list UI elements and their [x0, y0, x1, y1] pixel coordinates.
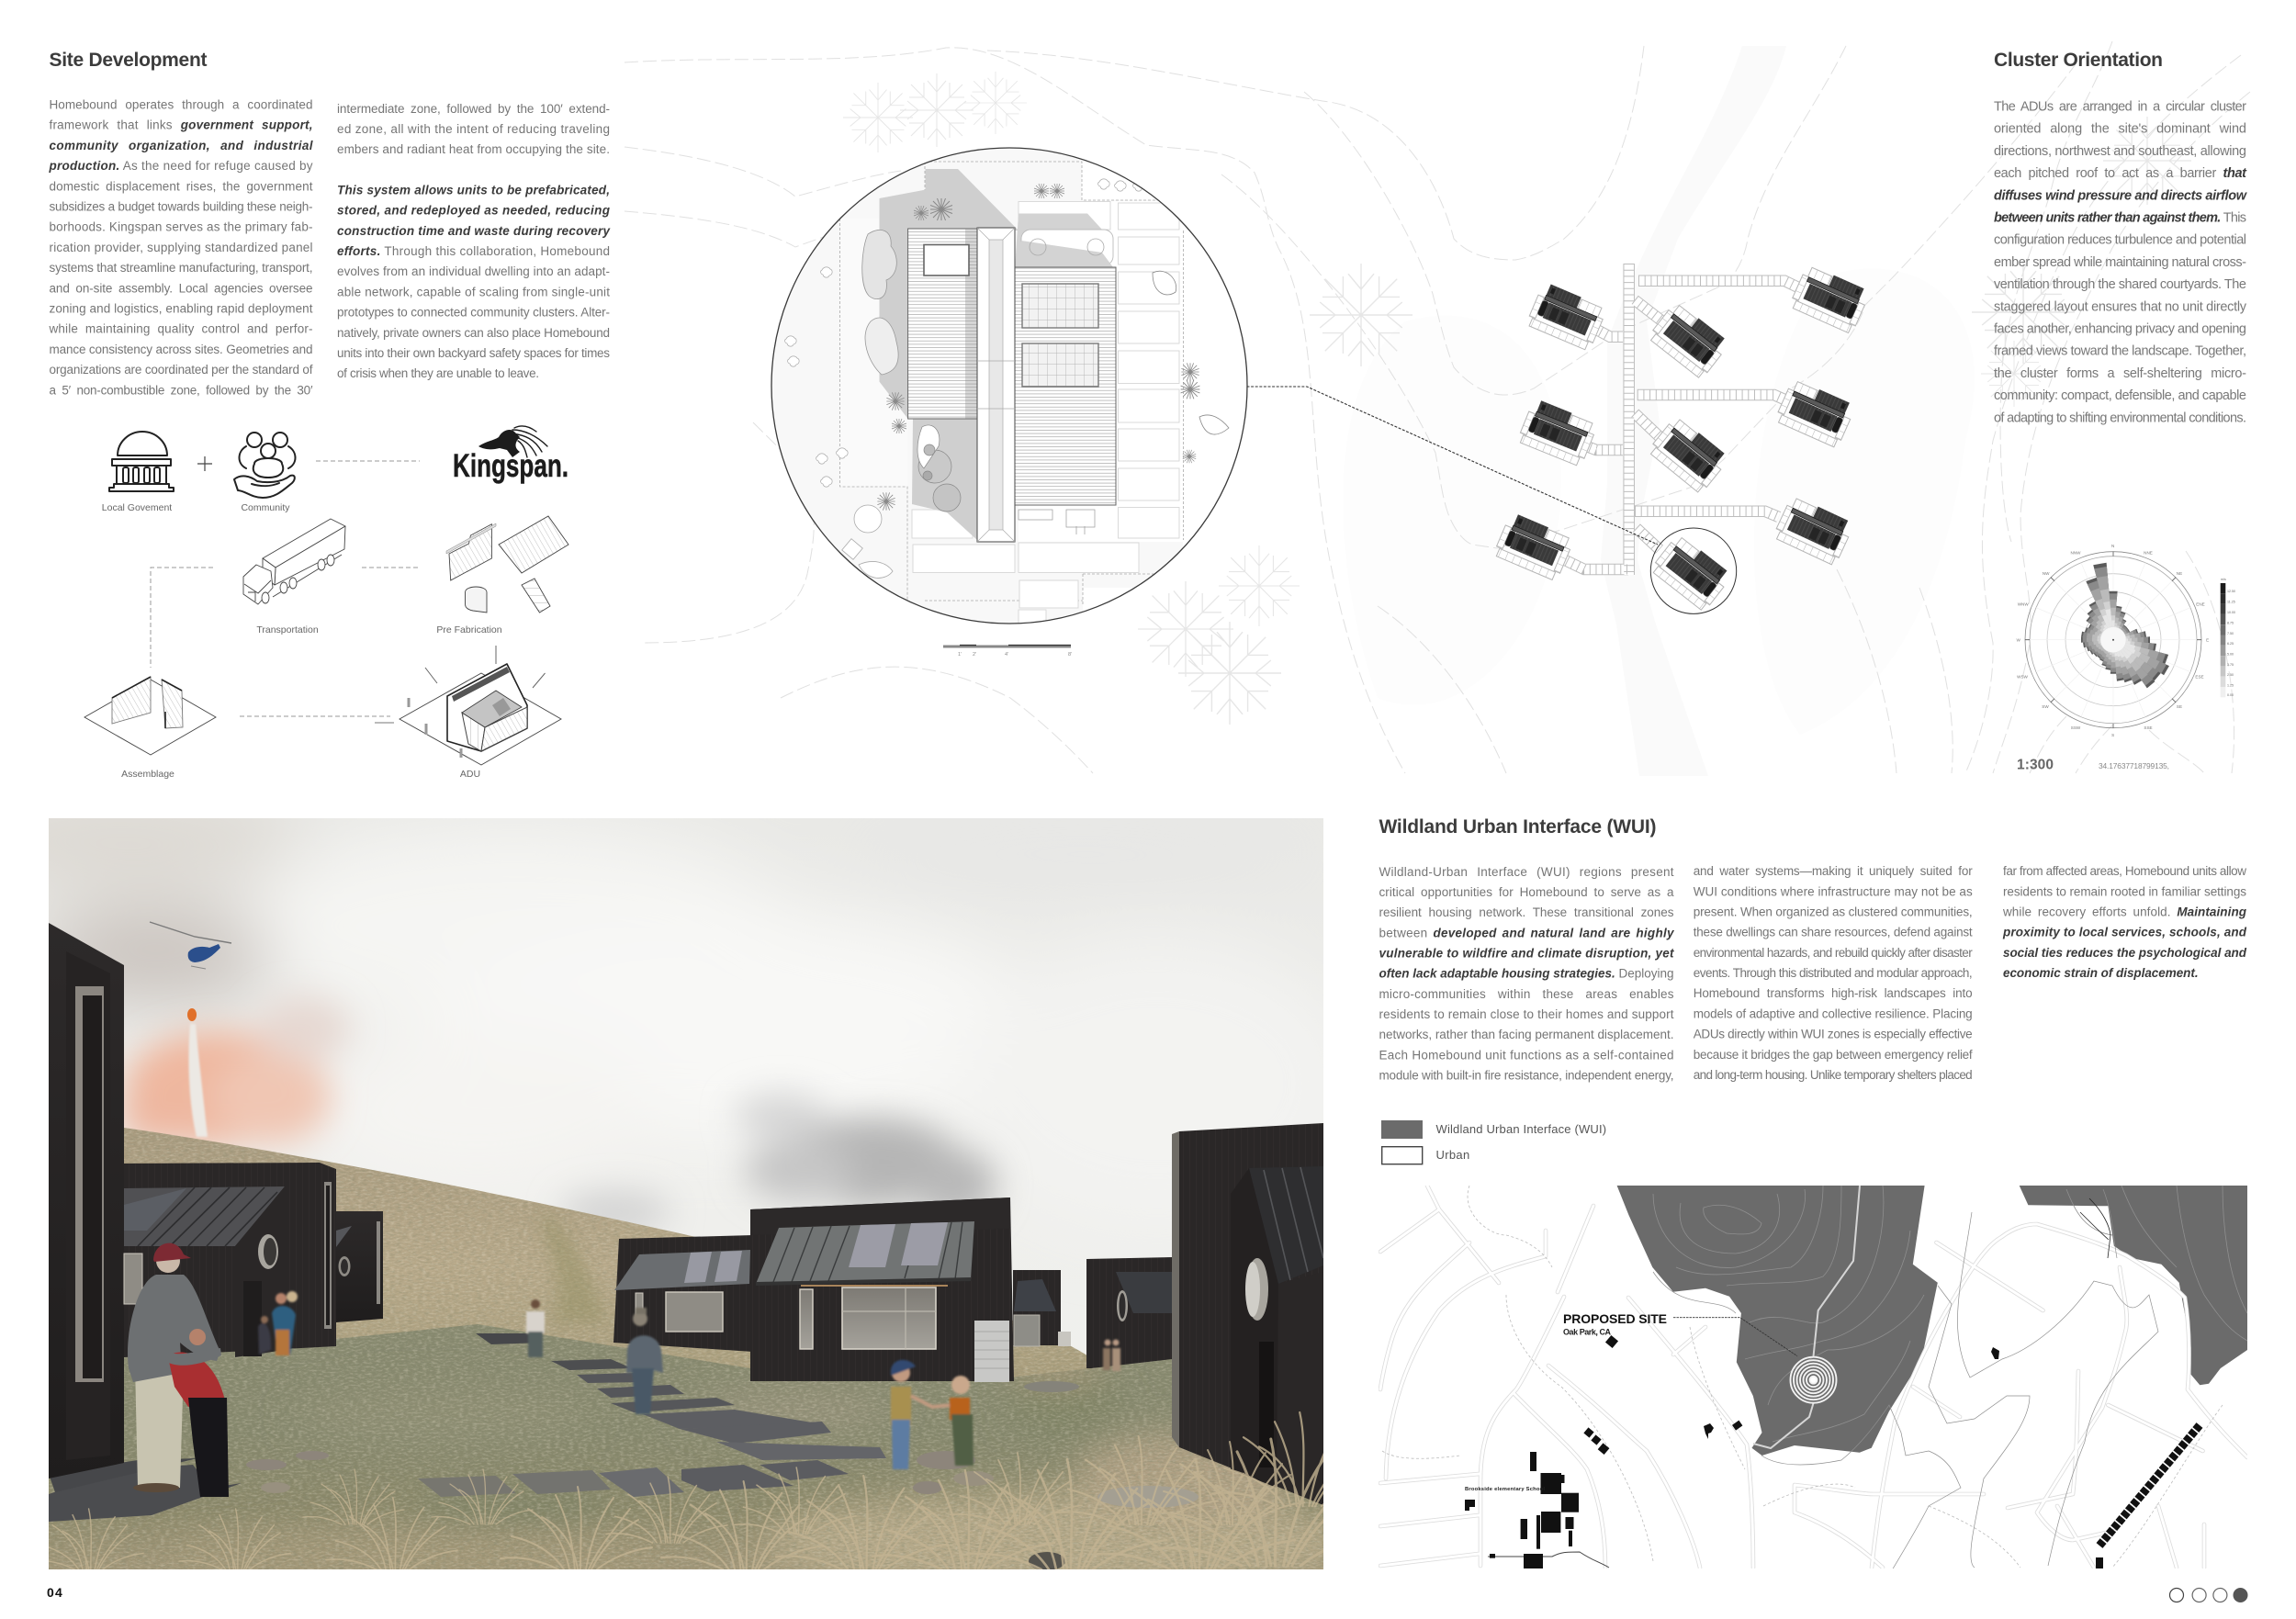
hillside — [124, 1128, 1091, 1377]
arrow: dashed leader from cluster to detail plan — [1247, 387, 1658, 545]
text block: WUI column 2: WUI conditions where infrastructure may not be as — [1694, 884, 1973, 898]
text block: site development column 1: mance consistency across sites. Geometries and — [50, 343, 312, 356]
label: coordinates: 34.17637718799135, — [2099, 761, 2169, 770]
children holding hands — [891, 1360, 974, 1469]
chart: wind rose: ESE — [2195, 674, 2204, 680]
legend: wind speed scale: 12.50 — [2227, 590, 2235, 593]
text block: site development column 1 — [48, 97, 313, 397]
text block: site development column 1: Homebound operates through a coordinated — [50, 97, 312, 112]
icon: prefabricated components — [446, 516, 568, 613]
leader line — [1673, 1318, 1797, 1356]
process diagram: government to ADU — [84, 426, 568, 780]
boundary dashes — [840, 162, 1184, 606]
dashed link: assemblage to ADU — [240, 715, 390, 717]
text block: cluster orientation: ember spread while maintaining natural cross- — [1994, 255, 2246, 270]
text block: WUI column 3 — [2002, 864, 2247, 980]
legend: wind speed scale: 11.25 — [2227, 601, 2235, 604]
couple in distance — [1103, 1339, 1120, 1371]
legend: WUI and urban — [1381, 1120, 1606, 1164]
text block: cluster orientation: each pitched roof to act as a barrier that — [1994, 166, 2247, 181]
text block: cluster orientation: The ADUs are arranged in a circular cluster — [1994, 99, 2246, 114]
text block: WUI column 1: resilient housing network. These transitional zones — [1379, 905, 1674, 919]
roads — [1380, 1186, 2247, 1568]
heading: wildland urban interface: Wildland Urban Interface (WUI) — [1379, 816, 1657, 838]
label: school: Brookside elementary School — [1465, 1487, 1545, 1492]
scale bar: 2' — [973, 652, 976, 658]
text block: site development column 1: rication provider, supplying standardized panel — [50, 241, 312, 254]
text block: WUI column 3: while recovery efforts unfold. Maintaining — [2002, 905, 2247, 919]
text block: WUI column 1: Wildland-Urban Interface (WUI) regions present — [1379, 865, 1674, 879]
text block: WUI column 3: economic strain of displacement. — [2003, 966, 2199, 980]
dashed link: community to Kingspan — [316, 460, 420, 462]
text block: site development column 2: units into their own backyard safety spaces for times — [337, 346, 610, 360]
chart: wind rose: SE — [2177, 704, 2182, 709]
buildings — [1465, 1335, 1999, 1568]
spine — [977, 228, 1015, 542]
WUI zones — [1617, 1186, 2247, 1456]
scale bar — [943, 645, 1072, 658]
legend: wind speed scale: 8.75 — [2227, 621, 2234, 624]
text block: site development column 2: This system allows units to be prefabricated, — [337, 184, 610, 197]
text block: WUI column 2: environmental hazards, and rebuild quickly after disaster — [1694, 946, 1973, 960]
text block: cluster orientation: of adapting to shifting environmental conditions. — [1994, 410, 2246, 425]
text block: cluster orientation: diffuses wind pressure and directs airflow — [1994, 188, 2248, 203]
entry mat — [1019, 510, 1095, 534]
callout: highlighted unit circle — [1650, 528, 1737, 613]
legend: wind speed scale: 1.25 — [2227, 683, 2234, 687]
old man and child — [128, 1243, 229, 1497]
text block: site development column 2: able network, capable of scaling from single-unit — [337, 285, 610, 299]
text block: site development column 2: construction time and waste during recovery — [337, 224, 611, 238]
chart: wind rose: SSE — [2144, 725, 2153, 730]
chart: wind rose: S — [2111, 733, 2114, 737]
walker on path — [526, 1299, 545, 1357]
text block: WUI column 2: these dwellings can share resources, defend against — [1694, 926, 1973, 939]
text block: WUI column 3: far from affected areas, Homebound units allow — [2003, 864, 2246, 878]
text block: site development column 2: of crisis when they are unable to leave. — [337, 366, 539, 380]
logo: Kingspan: Kingspan. — [453, 448, 568, 484]
text block: site development column 2 — [337, 102, 611, 380]
site plan background: contours, corridor and trees — [625, 41, 2250, 776]
man with hat — [626, 1308, 663, 1414]
cluster plan: walkways — [1561, 264, 1798, 575]
text block: site development column 1: organizations are coordinated per the standard of — [50, 363, 313, 377]
label: transportation: Transportation — [256, 624, 319, 635]
text block: WUI column 1: residents to remain close to their homes and support — [1379, 1007, 1674, 1021]
label: page number: 04 — [47, 1585, 63, 1600]
row of buildings — [2099, 1425, 2200, 1546]
text block: WUI column 1 — [1379, 865, 1675, 1082]
scale bar: 1' — [958, 652, 962, 658]
lounge — [1016, 230, 1113, 267]
legend: wind speed scale: 6.25 — [2227, 642, 2234, 646]
text block: WUI column 2: events. Through this distributed and modular approach, — [1694, 966, 1973, 980]
icon: finished ADU on plot — [400, 646, 561, 765]
tick mark by ADU plot — [375, 722, 394, 724]
text block: cluster orientation: framed views toward the landscape. Together, — [1994, 344, 2246, 359]
text block: site development column 1: zoning and logistics, enabling rapid deployment — [50, 301, 313, 316]
text block: WUI column 1: often lack adaptable housing strategies. Deploying — [1379, 967, 1673, 981]
heading: cluster orientation: Cluster Orientation — [1994, 50, 2163, 71]
text block: site development column 1: a 5′ non-combustible zone, followed by the 30′ — [50, 383, 313, 397]
label: assemblage: Assemblage — [121, 769, 174, 780]
cast shadows — [880, 169, 1019, 419]
text block: WUI column 1: micro-communities within these areas enables — [1379, 987, 1674, 1001]
detail plan: single ADU in circle — [771, 147, 1247, 628]
label: community: Community — [241, 502, 290, 513]
map: proposed site in Oak Park — [1380, 1186, 2247, 1570]
dashed links: assemblage, transportation and prefabrication — [151, 568, 420, 668]
text block: WUI column 1: between developed and natural land are highly — [1379, 926, 1675, 939]
rocks — [246, 1381, 1199, 1570]
site rings — [1791, 1357, 1837, 1403]
label: pre fabrication: Pre Fabrication — [436, 624, 502, 635]
chart: wind rose: NE — [2177, 571, 2182, 576]
text block: WUI column 2 — [1694, 864, 1973, 1082]
text block: cluster orientation: configuration reduces turbulence and potential — [1994, 233, 2246, 248]
clouds and smoke — [49, 818, 1231, 1229]
icon: plus sign — [197, 456, 212, 471]
legend: wind speed scale: 7.50 — [2227, 632, 2234, 635]
chart: wind rose: NW — [2043, 571, 2050, 576]
text block: WUI column 1: critical opportunities for Homebound to serve as a — [1379, 885, 1674, 899]
scale bar: 8' — [1068, 652, 1072, 658]
legend: wind speed scale: 5.00 — [2227, 652, 2234, 656]
text block: site development column 1: domestic displacement rises, the government — [50, 179, 313, 193]
label: ADU: ADU — [460, 769, 480, 780]
label: local government: Local Govement — [102, 502, 172, 513]
pagination dots — [2169, 1588, 2248, 1602]
text block: site development column 1: framework that links government support, — [50, 118, 312, 132]
photo: rendering of cluster during wildfire — [49, 818, 1323, 1569]
legend: wind speed scale: 10.00 — [2227, 611, 2235, 614]
text block: site development column 1: borhoods. Kingspan serves as the primary fab- — [50, 220, 312, 234]
text block: WUI column 2: because it bridges the gap between emergency relief — [1694, 1048, 1973, 1062]
sky — [49, 818, 1323, 1355]
text block: site development column 2: intermediate zone, followed by the 100′ extend- — [337, 102, 610, 116]
text block: WUI column 1: module with built-in fire resistance, independent energy, — [1379, 1069, 1673, 1082]
scale bar: 4' — [1005, 652, 1008, 658]
chart: wind rose: ENE — [2196, 602, 2205, 606]
paving stones — [49, 1333, 886, 1522]
text block: cluster orientation: community: compact, defensible, and capable — [1994, 388, 2246, 403]
text block: WUI column 1: networks, rather than facing permanent displacement. — [1379, 1028, 1673, 1041]
text block: site development column 1: production. As the need for refuge caused by — [48, 159, 313, 173]
chart: wind rose: WSW — [2017, 674, 2029, 680]
legend: wind speed scale: m/s — [2221, 578, 2226, 581]
chart: wind rose: SW — [2042, 704, 2049, 709]
text block: WUI column 2: and water systems—making it uniquely suited for — [1694, 864, 1973, 878]
text block: site development column 2: prototypes to connected community clusters. Alter- — [337, 305, 610, 320]
text block: site development column 2: natively, private owners can also place Homebound — [337, 326, 610, 340]
text block: WUI column 1: vulnerable to wildfire and climate disruption, yet — [1379, 946, 1674, 961]
chart: wind rose: WNW — [2018, 602, 2029, 606]
chart: wind rose: E — [2206, 637, 2209, 643]
contours in WUI — [1653, 1186, 2247, 1442]
text block: WUI column 1: Each Homebound unit functions as a self-contained — [1379, 1048, 1673, 1062]
heading: site development: Site Development — [50, 50, 208, 71]
chart: wind rose: N — [2111, 544, 2114, 548]
text block: site development column 2: ed zone, all with the intent of reducing traveling — [337, 122, 610, 136]
chart: wind rose: W — [2017, 637, 2021, 643]
text block: site development column 1: subsidizes a budget towards building these neigh- — [50, 200, 312, 213]
left roof — [908, 229, 977, 419]
family by house — [258, 1291, 298, 1355]
people — [128, 1243, 1120, 1497]
dotted contours — [1382, 1186, 2223, 1568]
text block: site development column 2: evolves from an individual dwelling into an adapt- — [337, 264, 610, 278]
water drop stream and helicopter — [150, 922, 231, 1137]
text block: site development column 2: embers and radiant heat from occupying the site. — [337, 142, 610, 156]
icon: truck — [243, 519, 345, 604]
courtyard garden — [917, 425, 961, 512]
foreground grass tufts — [32, 1412, 1385, 1569]
main central house — [750, 1197, 1014, 1382]
text block: site development column 1: systems that streamline manufacturing, transport, — [50, 261, 312, 275]
label: proposed site: PROPOSED SITE — [1563, 1311, 1667, 1326]
legend: WUI and urban: Urban — [1436, 1148, 1469, 1162]
text block: WUI column 3: proximity to local services, schools, and — [2002, 926, 2247, 939]
legend: wind speed scale: 3.75 — [2227, 663, 2234, 667]
paver grid — [912, 202, 1179, 628]
text block: cluster orientation: between units rather than against them. This — [1994, 211, 2246, 226]
fine parcel lines — [1653, 1189, 2158, 1570]
text block: site development column 1: while maintaining quality control and perfor- — [48, 322, 312, 336]
text block: cluster orientation: the cluster forms a self-sheltering micro- — [1994, 366, 2246, 381]
text block: WUI column 2: and long-term housing. Unlike temporary shelters placed — [1694, 1068, 1973, 1082]
legend: wind speed scale: 2.50 — [2227, 673, 2234, 677]
chart: wind rose — [2017, 544, 2209, 737]
legend: wind speed scale: 0.00 — [2227, 693, 2234, 697]
text block: cluster orientation: staggered layout ensures that no unit directly — [1994, 299, 2247, 314]
cluster plan: nine ADU units — [1493, 264, 1871, 613]
house one — [124, 1163, 336, 1357]
chart: wind rose: NNW — [2071, 551, 2081, 555]
right foreground tower house — [1172, 1123, 1323, 1505]
right roof — [1015, 267, 1116, 505]
left foreground tower — [49, 923, 124, 1478]
text block: site development column 1: community organization, and industrial — [50, 139, 313, 152]
text block: WUI column 2: models of adaptive and collective resilience. Placing — [1694, 1006, 1973, 1020]
chart: wind rose: SSW — [2071, 725, 2081, 730]
text block: site development column 1: and on-site assembly. Local agencies oversee — [50, 281, 312, 295]
text block: WUI column 2: ADUs directly within WUI zones is especially effective — [1694, 1028, 1973, 1041]
text block: cluster orientation: oriented along the site's dominant wind — [1994, 122, 2246, 137]
ground stipple — [771, 147, 1183, 624]
text block: site development column 2: stored, and redeployed as needed, reducing — [337, 204, 611, 217]
logo: Kingspan — [453, 426, 568, 484]
text block: WUI column 2: Homebound transforms high-risk landscapes into — [1694, 986, 1973, 1000]
text block: site development column 2: efforts. Through this collaboration, Homebound — [337, 244, 610, 258]
icon: local government dome — [109, 432, 174, 491]
text block: cluster orientation: ventilation through the shared courtyards. The — [1994, 277, 2246, 292]
trail — [1753, 1186, 1860, 1448]
text block: cluster orientation: directions, northwest and southeast, allowing — [1994, 144, 2246, 159]
icon: assemblage on plot — [84, 677, 216, 755]
text block: WUI column 2: present. When organized as clustered communities, — [1694, 905, 1973, 919]
meadow — [49, 1324, 1323, 1569]
icon: community in hand — [234, 433, 296, 498]
text block: WUI column 3: residents to remain rooted in familiar settings — [2003, 884, 2246, 898]
text block: WUI column 3: social ties reduces the psychological and — [2003, 946, 2247, 960]
label: Oak Park: Oak Park, CA — [1563, 1328, 1611, 1337]
legend: wind speed scale — [2221, 578, 2235, 697]
legend: WUI and urban: Wildland Urban Interface (WUI) — [1436, 1122, 1606, 1136]
text block: cluster orientation — [1994, 99, 2248, 425]
label: scale ratio: 1:300 — [2017, 757, 2054, 773]
chart: wind rose: NNE — [2144, 551, 2153, 555]
background houses — [336, 1211, 1172, 1368]
shrubs and sparks — [785, 179, 1229, 578]
text block: cluster orientation: faces another, enhancing privacy and opening — [1994, 321, 2246, 336]
